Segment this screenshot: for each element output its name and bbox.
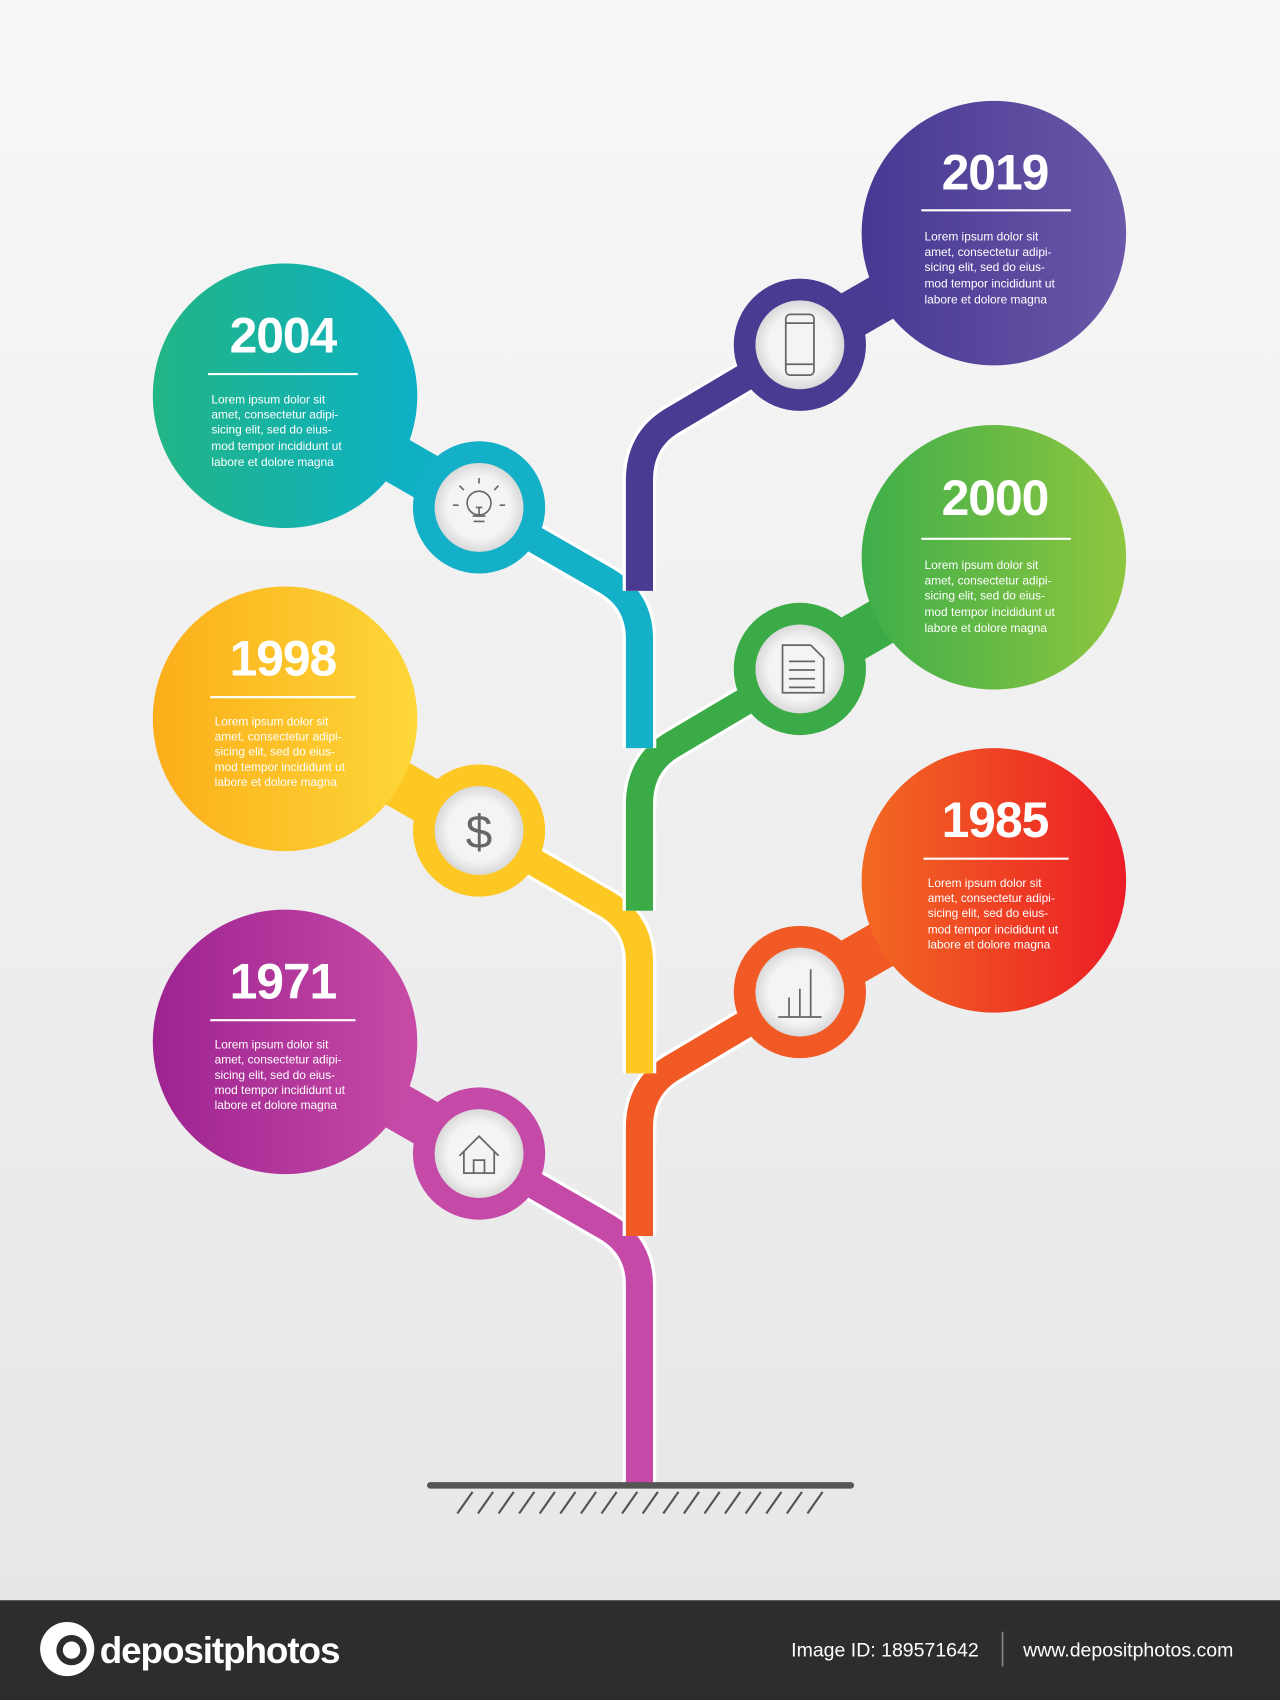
node: 2019: 2019 [942,145,1048,201]
node: 1971: Lorem ipsum dolor sit [215,1037,329,1051]
node: 2019: mod tempor incididunt ut [925,276,1056,290]
tree trunk and branches [479,345,800,1483]
node: 2004: amet, consectetur adipi- [211,407,338,421]
icon: bar chart [778,969,822,1017]
node: 1971 [153,910,545,1220]
node: 2004: 2004 [230,307,338,363]
icon: document [783,645,824,693]
node: 1985: 1985 [942,792,1049,848]
footer bar: depositphotos [100,1630,339,1671]
node: 2004: labore et dolore magna [211,455,334,469]
node: 1998 [153,587,545,897]
node: 2019 [734,101,1126,411]
node: 2004: sicing elit, sed do eius- [211,423,332,437]
node: 1971: 1971 [230,954,337,1010]
node: 1985: mod tempor incididunt ut [928,922,1059,936]
node: 2000 [734,425,1126,735]
node: 1998: labore et dolore magna [215,775,337,789]
footer bar [0,1600,1280,1700]
node: 1971: amet, consectetur adipi- [215,1053,342,1067]
footer bar: www.depositphotos.com [1022,1640,1233,1662]
node: 2019: labore et dolore magna [925,293,1047,307]
node: 1985: sicing elit, sed do eius- [928,906,1048,920]
node: 1985: labore et dolore magna [928,938,1051,952]
node: 1985: Lorem ipsum dolor sit [928,876,1042,890]
node: 1998: Lorem ipsum dolor sit [215,714,329,728]
node: 2000: 2000 [942,470,1048,526]
node: 2019: amet, consectetur adipi- [925,245,1052,259]
icon: house [460,1136,499,1173]
node: 2000: amet, consectetur adipi- [925,573,1052,587]
node: 2004 [153,263,545,574]
node: 2000: mod tempor incididunt ut [925,605,1056,619]
node: 1998: sicing elit, sed do eius- [215,745,335,759]
node: 2000: Lorem ipsum dolor sit [925,558,1039,572]
icon: camera logo [40,1622,94,1676]
node: 1971: labore et dolore magna [215,1098,337,1112]
footer bar: Image ID: 189571642 [791,1640,979,1662]
node: 1971: sicing elit, sed do eius- [215,1068,335,1082]
node: 2019: sicing elit, sed do eius- [925,260,1045,274]
node: 1998: 1998 [230,630,337,686]
node: 1998: mod tempor incididunt ut [215,760,346,774]
icon: dollar: $ [466,806,492,859]
node: 2000: labore et dolore magna [925,621,1047,635]
node: 2004: mod tempor incididunt ut [211,439,342,453]
icon: light bulb [453,478,505,521]
node: 2000: sicing elit, sed do eius- [925,589,1045,603]
node: 2019: Lorem ipsum dolor sit [925,230,1039,244]
ground [430,1485,851,1514]
node: 1985: amet, consectetur adipi- [928,891,1055,905]
node: 1998: amet, consectetur adipi- [215,729,342,743]
node: 1985 [734,748,1126,1058]
node: 1971: mod tempor incididunt ut [215,1083,346,1097]
node: 2004: Lorem ipsum dolor sit [211,392,326,406]
icon: phone [786,314,814,375]
